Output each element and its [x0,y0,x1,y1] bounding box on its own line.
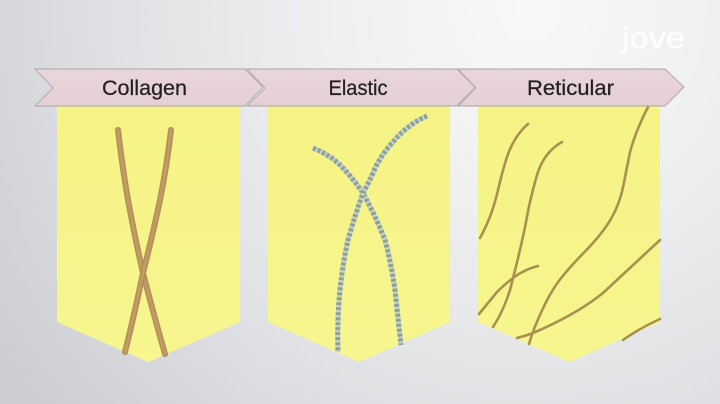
banner: reticular [458,69,684,106]
fibers: reticular [479,107,660,344]
logo: jove watermark: jove [621,22,685,55]
panel: collagen [57,105,240,362]
panel: elastic [268,105,450,362]
banner: collagen [35,69,263,106]
fibers: collagen [118,130,171,354]
fibers: elastic [313,116,427,352]
label: elastic: Elastic [328,76,388,100]
banner: elastic [247,69,475,106]
label: collagen: Collagen [102,76,187,100]
panel: reticular [478,105,660,362]
label: reticular: Reticular [527,76,614,100]
